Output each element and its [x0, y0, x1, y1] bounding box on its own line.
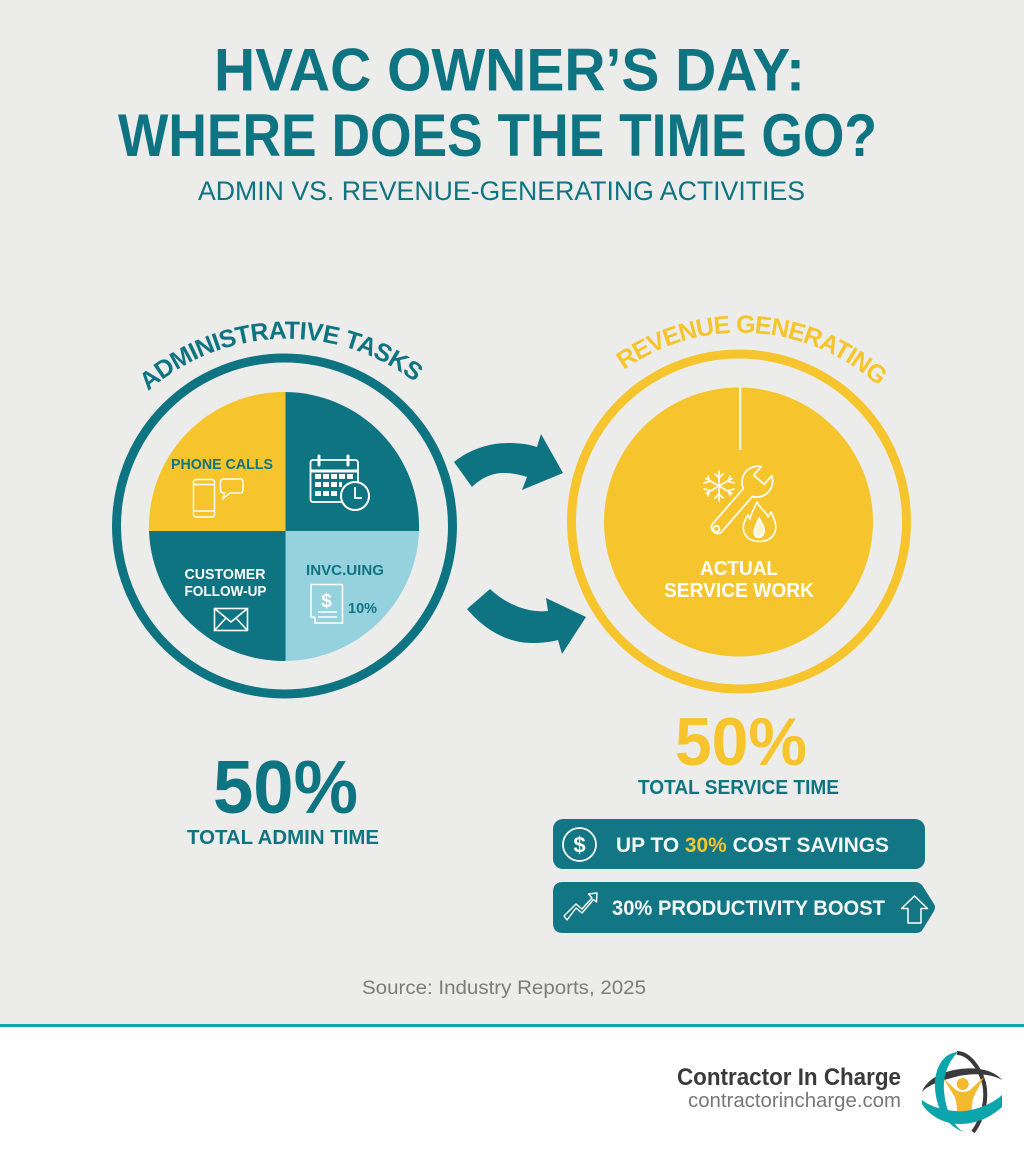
- icon: calendar and clock: [310, 456, 369, 510]
- icon: dollar coin: [563, 828, 596, 861]
- pie segment: customer follow-up: [149, 531, 286, 661]
- icon: flame: [743, 502, 776, 542]
- icon: wrench: [702, 461, 778, 542]
- label: 10 percent: 10%: [348, 601, 377, 617]
- stat: 50 percent admin: 50%: [213, 745, 358, 829]
- brand name: Contractor In Charge: [677, 1064, 901, 1091]
- label: actual service work: ACTUAL: [700, 558, 778, 580]
- pie segment: phone calls: [149, 392, 286, 531]
- text: productivity boost: 30% PRODUCTIVITY BOOST: [612, 896, 885, 920]
- text: cost savings: UP TO 30% COST SAVINGS: [616, 833, 889, 857]
- pie: [604, 388, 873, 656]
- label: customer follow-up: CUSTOMER: [184, 567, 266, 583]
- icon: trend arrow: [564, 893, 597, 920]
- logo: [922, 1052, 1002, 1132]
- source: Source: Industry Reports, 2025: [362, 978, 646, 999]
- divider line: [739, 386, 741, 450]
- brand url: contractorincharge.com: [688, 1090, 901, 1112]
- label: invoicing: INVC.UING: [306, 563, 384, 579]
- subtitle: ADMIN VS. REVENUE-GENERATING ACTIVITIES: [198, 176, 805, 206]
- icon: up arrow: [902, 896, 928, 923]
- icon: invoice document: $: [321, 591, 332, 612]
- icon: envelope: [214, 608, 248, 630]
- arrow: bottom: [467, 589, 586, 654]
- heading: administrative tasks: ADMINISTRATIVE TASKS: [142, 322, 422, 391]
- label: actual service work: SERVICE WORK: [664, 580, 815, 602]
- panel: administrative tasks: [112, 322, 457, 698]
- title: WHERE DOES THE TIME GO?: [118, 102, 877, 169]
- title: [118, 36, 877, 169]
- stat: 50 percent admin: [187, 745, 379, 849]
- icon: dollar coin: $: [573, 832, 586, 858]
- stat: 50 percent admin: TOTAL ADMIN TIME: [187, 827, 379, 849]
- label: customer follow-up: [184, 567, 267, 600]
- stat: 50 percent service: [638, 704, 839, 799]
- panel: revenue generating: [567, 315, 911, 694]
- footer: [0, 1024, 1024, 1154]
- icon: invoice document: [311, 584, 342, 623]
- stat: 50 percent service: 50%: [675, 704, 807, 780]
- heading: revenue generating: REVENUE GENERATING: [616, 315, 886, 383]
- icon: phone and speech bubble: [194, 479, 243, 517]
- pie segment: calendar: [286, 392, 419, 531]
- pie segment: invoicing: [286, 531, 419, 661]
- label: actual service work: [664, 558, 815, 602]
- label: customer follow-up: FOLLOW-UP: [184, 584, 267, 600]
- stat: 50 percent service: TOTAL SERVICE TIME: [638, 777, 839, 799]
- icon: snowflake: [704, 471, 734, 501]
- outer ring: [116, 358, 452, 694]
- arrow: top: [454, 434, 563, 490]
- label: phone calls: PHONE CALLS: [171, 456, 273, 473]
- callout: productivity boost: [553, 882, 935, 933]
- outer ring: [572, 354, 906, 689]
- callout: cost savings: [553, 819, 925, 869]
- title: HVAC OWNER’S DAY:: [214, 36, 805, 104]
